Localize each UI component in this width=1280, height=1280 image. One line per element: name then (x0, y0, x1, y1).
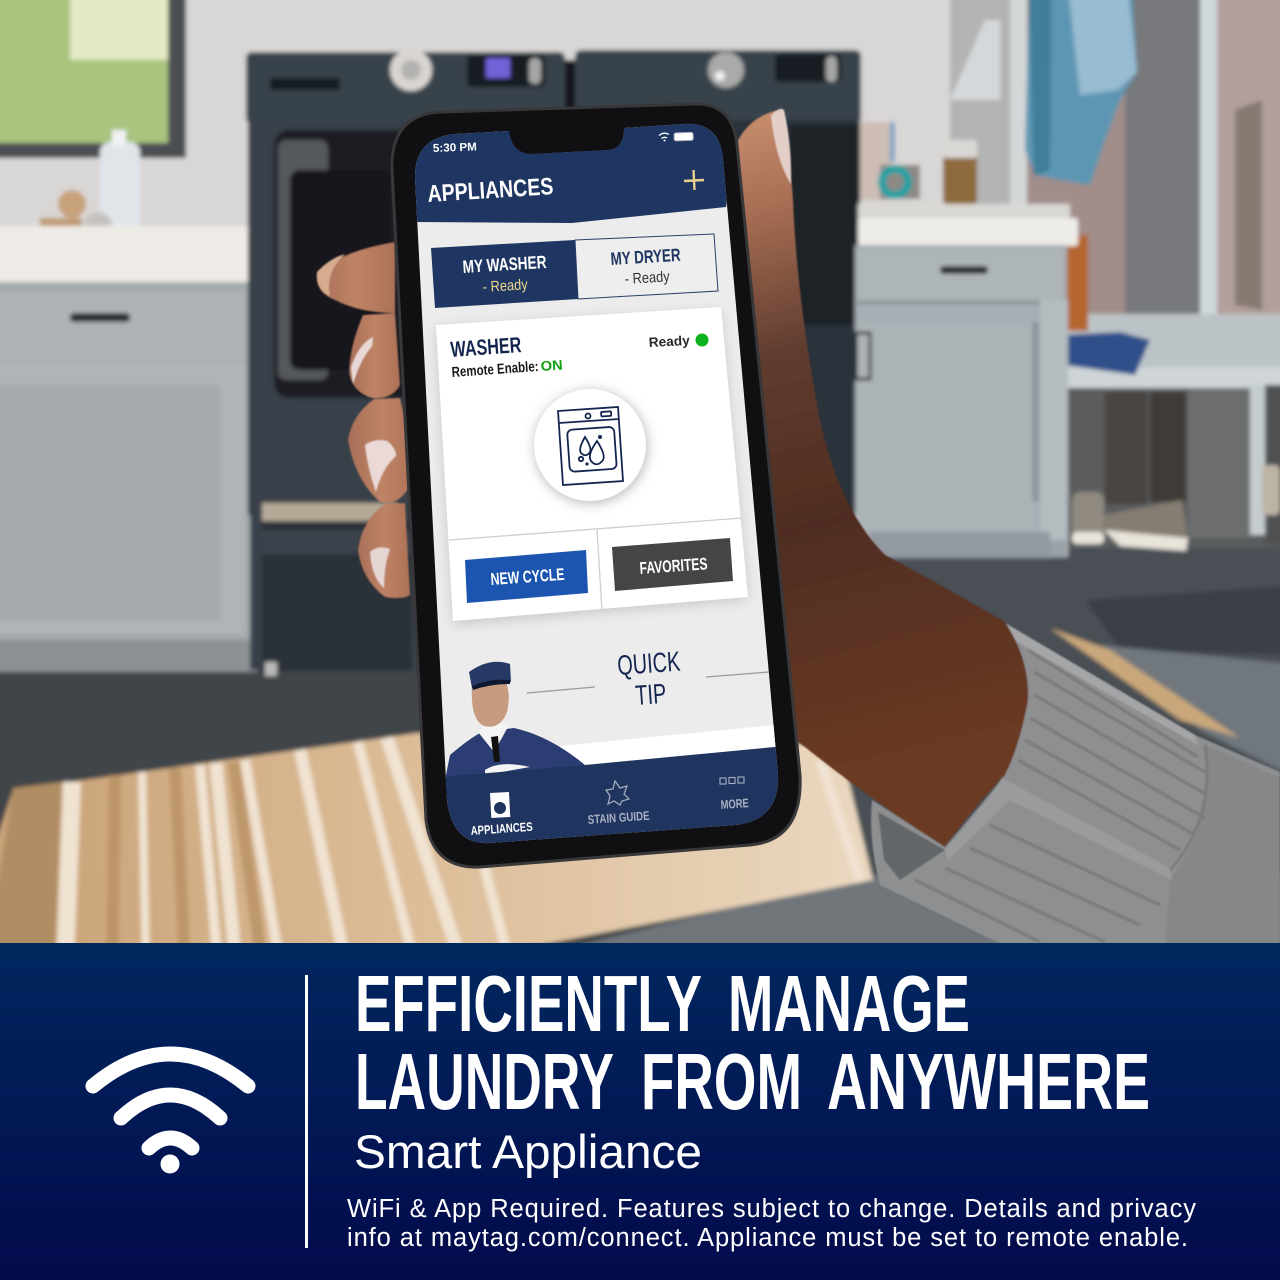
fingers (317, 242, 416, 598)
tab: my dryer (575, 234, 718, 299)
left counter and cabinets (0, 226, 257, 672)
more icon (720, 777, 744, 784)
disclaimer (347, 1195, 1196, 1252)
window (0, 0, 186, 158)
headline: EFFICIENTLY (355, 959, 702, 1048)
floor (0, 545, 1280, 965)
tab: my washer (431, 240, 578, 308)
phone case (392, 104, 800, 867)
washer card: ON (540, 356, 563, 374)
washer card (436, 307, 748, 621)
bottom navigation: STAIN GUIDE (587, 809, 650, 827)
boots and shoes under bench (1072, 392, 1280, 551)
appliances icon (490, 792, 510, 818)
favorites button (612, 538, 733, 591)
hanging blue towel (1025, 0, 1137, 185)
wifi icon (93, 1054, 248, 1174)
phone screen (414, 124, 778, 844)
app header (415, 124, 727, 223)
tab: my washer: - Ready (482, 276, 529, 296)
plus button (684, 170, 704, 190)
headline: LAUNDRY (355, 1037, 614, 1126)
headline: MANAGE (728, 959, 970, 1048)
bottom banner (0, 943, 1280, 1280)
washer icon (534, 389, 646, 501)
grey knit sweater sleeve (871, 620, 1280, 945)
disclaimer: WiFi & App Required. Features subject to change. Details and privacy (347, 1195, 1196, 1223)
headline (355, 959, 1150, 1126)
items on right counter (860, 122, 977, 204)
app header: 5:30 PM (433, 141, 477, 155)
laundry room photo background (0, 0, 1280, 965)
palm and thumb (700, 110, 1028, 847)
tab: my dryer: - Ready (624, 268, 671, 288)
mudroom wall, towel and bench (950, 0, 1280, 551)
smartphone (392, 104, 800, 867)
phone notch (509, 127, 624, 154)
washer card: Ready (648, 333, 691, 350)
thumbnail (771, 109, 791, 184)
quick tip: TIP (634, 678, 667, 711)
wifi and battery status (659, 132, 693, 142)
quick tip: QUICK (616, 646, 681, 681)
stain guide icon (606, 781, 629, 805)
bottom navigation: APPLIANCES (470, 820, 533, 838)
tab: my dryer: MY DRYER (610, 245, 681, 269)
divider (305, 975, 308, 1248)
subheading: Smart Appliance (354, 1125, 702, 1178)
new cycle button: NEW CYCLE (490, 565, 565, 589)
washer card shadow (436, 311, 748, 625)
headline: FROM (641, 1037, 802, 1126)
washer card: Remote Enable: (451, 359, 539, 381)
washer card: WASHER (450, 332, 522, 362)
quick tip (527, 652, 769, 705)
bottom navigation: MORE (720, 796, 749, 812)
disclaimer: info at maytag.com/connect. Appliance must be set to remote enable. (347, 1224, 1188, 1252)
new cycle button (465, 550, 588, 603)
favorites button: FAVORITES (639, 554, 708, 578)
right counter and cabinets (855, 204, 1078, 558)
bottom navigation (446, 746, 778, 844)
status dot (696, 334, 708, 346)
maytag man illustration (446, 662, 585, 795)
hand holding phone (317, 109, 1280, 945)
washer and dryer (246, 49, 861, 676)
woven rug (0, 628, 1240, 965)
headline: ANYWHERE (827, 1037, 1150, 1126)
bottle and decor on left counter (40, 130, 140, 240)
washer icon circle shadow (535, 391, 647, 503)
tab: my washer: MY WASHER (462, 252, 547, 277)
app header: APPLIANCES (427, 173, 554, 208)
